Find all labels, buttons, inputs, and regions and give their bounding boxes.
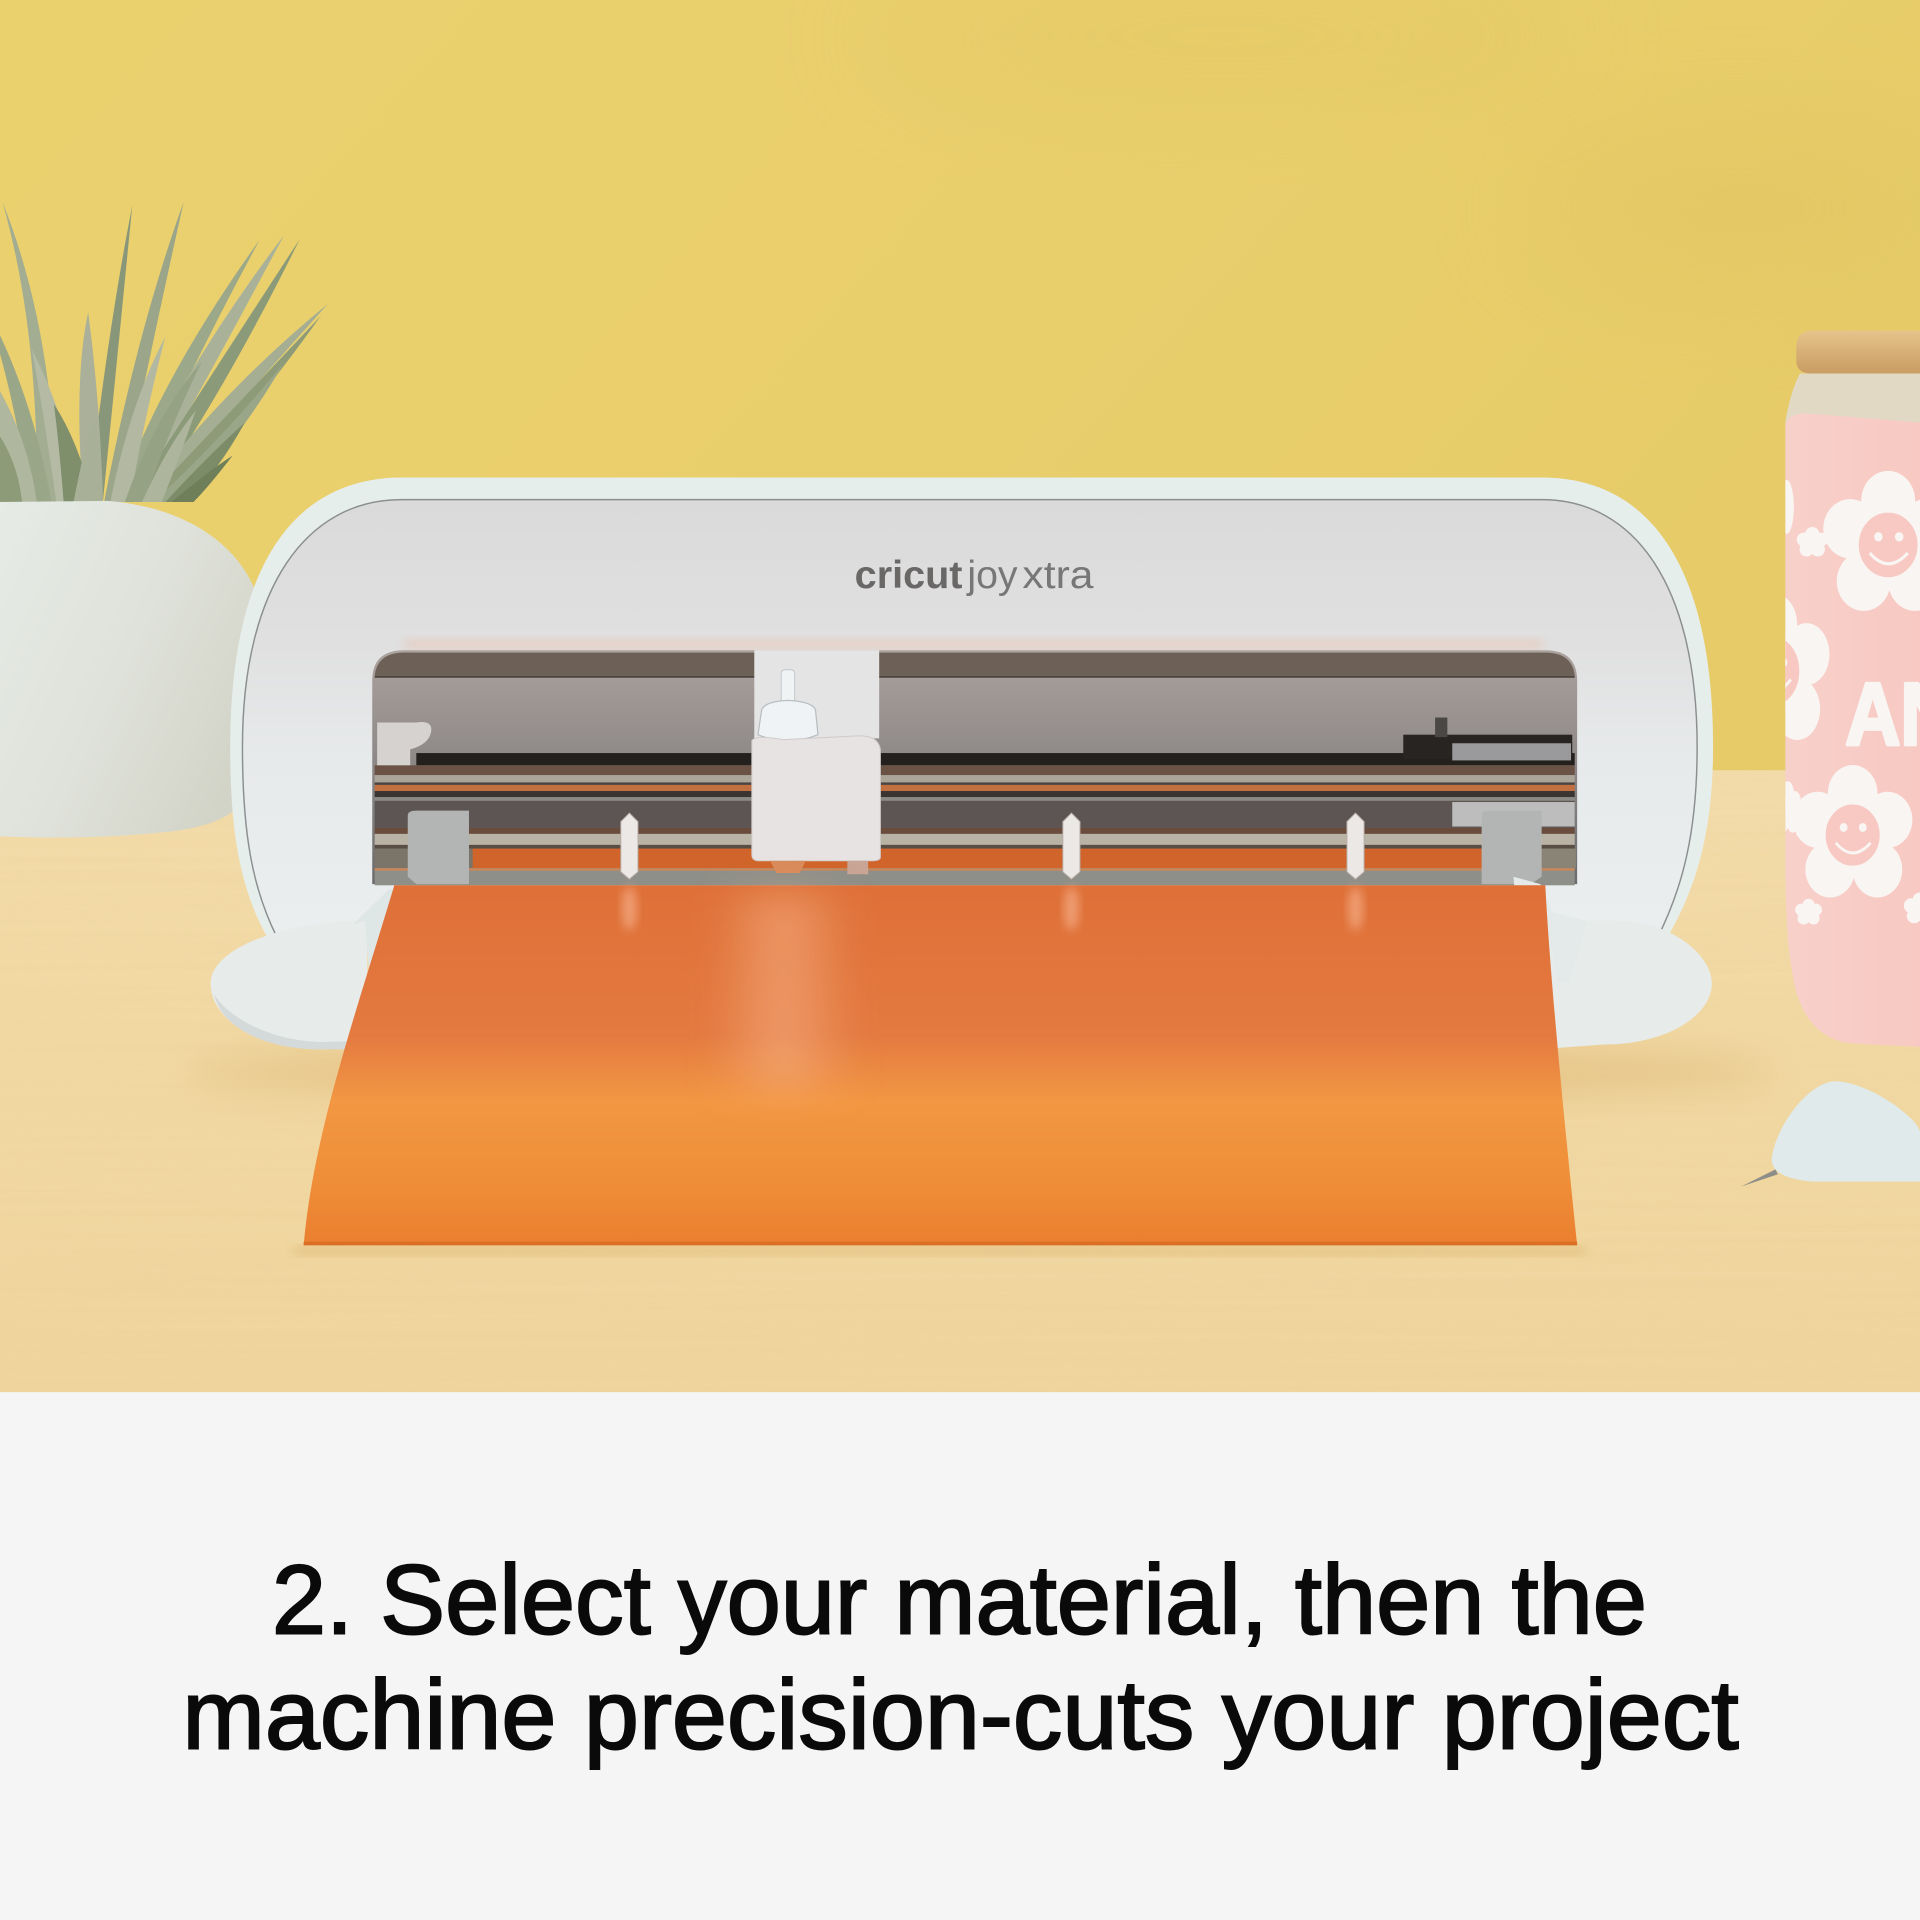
right slot bracket (1403, 718, 1575, 827)
jar bamboo lid (1796, 331, 1920, 373)
machine front face with seam (242, 500, 1697, 937)
caption text (182, 1544, 1739, 1770)
pinch rollers (408, 811, 1542, 884)
left feed tray (211, 889, 431, 1049)
jar flower decals (1785, 470, 1920, 924)
logo: cricut (855, 554, 962, 597)
air plant (0, 202, 328, 502)
carriage top plate (754, 650, 879, 738)
star wheels (621, 813, 1364, 879)
white round pot (0, 501, 264, 838)
left slot bracket (377, 722, 431, 765)
caption panel (0, 1392, 1920, 1920)
slot interior (372, 650, 1577, 885)
glass jar with smiley flowers (1785, 330, 1920, 1047)
blade housing knob (758, 670, 818, 741)
jar glass neck (1785, 373, 1920, 422)
jar pink body (1785, 413, 1920, 1047)
orange vinyl sheet (304, 885, 1577, 1245)
weeding tool (1741, 1081, 1920, 1187)
right feed tray (1513, 877, 1712, 1048)
cutting machine (211, 478, 1713, 1245)
logo: xtra (1022, 554, 1094, 597)
machine outer shell (230, 478, 1713, 937)
slot top reflection (404, 639, 1543, 650)
caption text: 2. Select your material, then the (272, 1544, 1647, 1654)
wooden table (0, 770, 1920, 1392)
caption text: machine precision-cuts your project (182, 1660, 1739, 1770)
logo: joy (966, 554, 1018, 597)
carriage block (752, 736, 880, 874)
photo background: yellow wall (0, 0, 1920, 857)
logo (855, 554, 1094, 597)
